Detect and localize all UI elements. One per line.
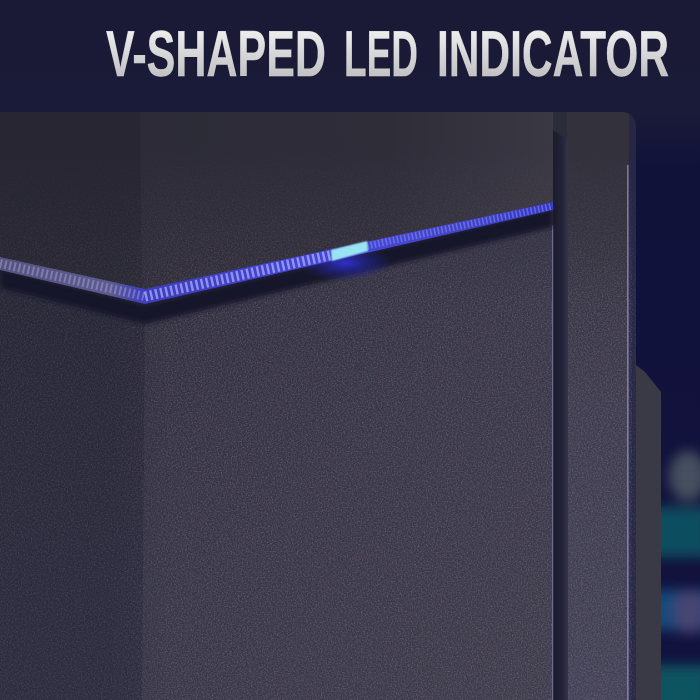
V-shaped LED strip <box>0 202 553 304</box>
title: V-SHAPED <box>106 17 326 90</box>
outer edge of column <box>629 112 636 700</box>
LED glow on the panel <box>299 245 391 281</box>
surface grain texture <box>0 190 636 700</box>
case body <box>0 112 636 700</box>
LED strip left ticks <box>0 264 145 296</box>
LED lit segment <box>331 241 368 261</box>
front panel left facet <box>0 268 145 700</box>
colored speckle on lit surfaces <box>0 112 632 700</box>
title: LED <box>344 17 418 90</box>
front panel upper left section <box>0 112 142 289</box>
top surface of the case <box>81 112 567 304</box>
title <box>106 17 669 90</box>
LED strip right ticks <box>145 255 331 296</box>
blurred background lights <box>640 451 700 700</box>
side panel behind case <box>632 362 661 700</box>
front panel upper right section <box>470 112 553 218</box>
LED strip body <box>0 202 553 304</box>
front panel main facet <box>142 210 553 700</box>
column highlight edges <box>552 225 553 700</box>
shadow below LED strip <box>0 208 553 324</box>
right vertical column <box>567 112 631 700</box>
LED strip far ticks <box>367 206 553 246</box>
column groove <box>553 130 568 700</box>
